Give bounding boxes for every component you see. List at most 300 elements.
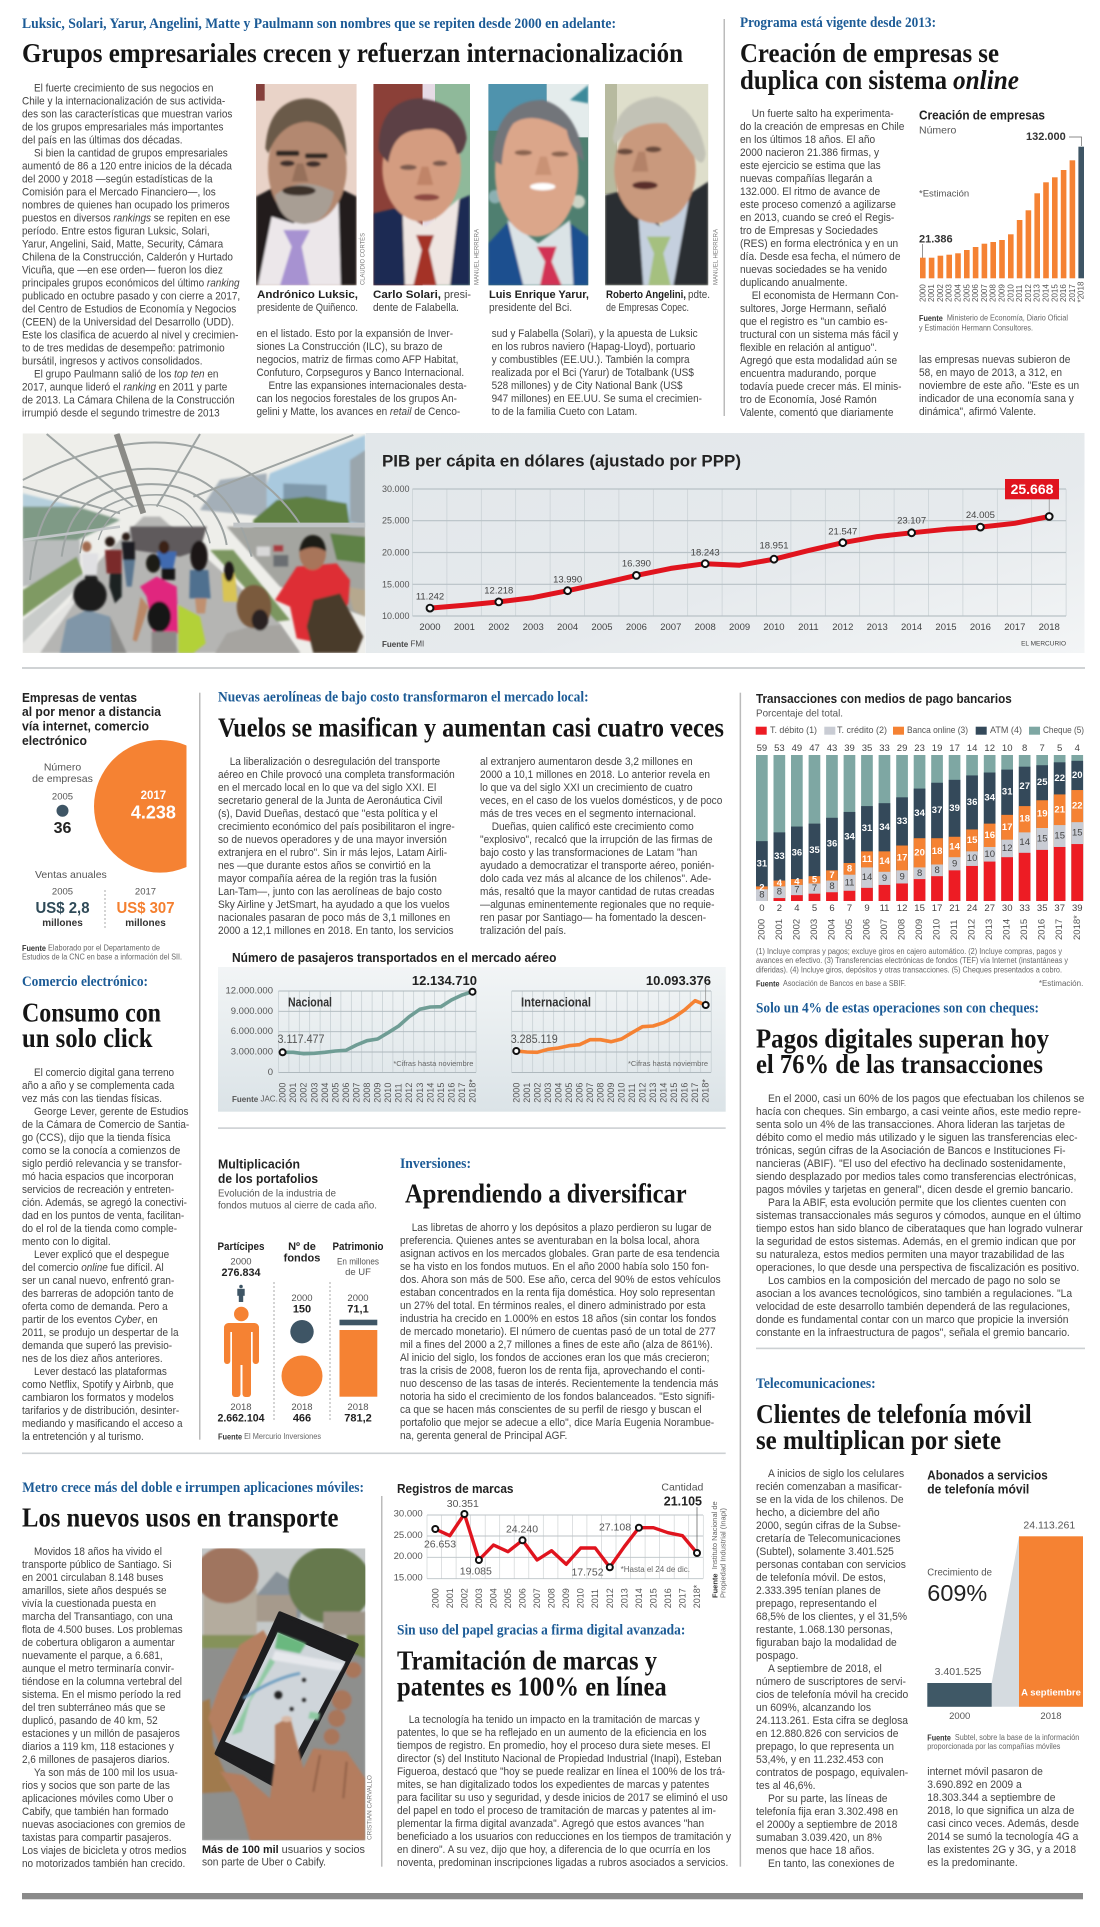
débito labels: 0 bbox=[759, 903, 765, 914]
years: 2014 bbox=[1002, 919, 1013, 940]
sales: US$ 2,8 bbox=[36, 900, 90, 917]
text block: telefonía columna 1: 53,4%, y en 11.232.453 con bbox=[756, 1754, 883, 1766]
line chart: Internacional: 2004 bbox=[553, 1083, 563, 1103]
value labels: 12.218 bbox=[484, 586, 513, 596]
kicker: Nuevas aerolíneas de bajo costo transformaron el mercado local: bbox=[218, 689, 589, 705]
x axis labels bbox=[419, 622, 1060, 633]
débito labels: 9 bbox=[864, 903, 870, 914]
source bbox=[710, 1501, 728, 1598]
text block: vuelos columna 1: extranjera en el rubro". Sin ir más lejos, Latam Airli- bbox=[218, 846, 447, 859]
text block: grupos columna 3: y combustibles (EE.UU.). También la compra bbox=[492, 354, 690, 366]
text block: en dinero". A su vez, dijo que hoy, a diferencia de lo que ocurría en los bbox=[397, 1844, 710, 1856]
text block: creación columna 1: 132.000. El ritmo de avance de bbox=[740, 185, 880, 198]
text block: mil a fines del 2000 a 2,7 millones a fines de este año (alza de 861%). bbox=[400, 1339, 713, 1351]
caption: Más de 100 mil usuarios y socios bbox=[202, 1844, 365, 1856]
column: patrimonio: 781,2 bbox=[344, 1413, 372, 1425]
value labels: 17.752 bbox=[571, 1567, 604, 1579]
panel: grupos empresariales bbox=[22, 16, 720, 420]
line chart: Nacional: 0 bbox=[268, 1067, 273, 1078]
text block: vuelos columna 2: —algunas eminentemente regionales que no requie- bbox=[480, 898, 715, 911]
line chart: Nacional: 2005 bbox=[330, 1083, 340, 1103]
ATM labels bbox=[757, 770, 1083, 869]
heading: creación de empresas: online bbox=[953, 65, 1019, 95]
x axis labels: 2014 bbox=[901, 622, 922, 633]
text block: telefonía columna 2: casi cinco veces. Además, desde bbox=[927, 1818, 1079, 1830]
text block: siglo perdió relevancia y se transfor- bbox=[22, 1157, 182, 1170]
text block: en 2001 circulaban 8.148 buses bbox=[22, 1571, 163, 1584]
crédito labels: 12 bbox=[1002, 843, 1012, 854]
text block: nuevas asociaciones con gremios de bbox=[22, 1818, 185, 1831]
text block: pagos móviles y tarjetas en general", dicen desde el gremio bancario. bbox=[756, 1184, 1073, 1196]
text block: mento con lo digital. bbox=[22, 1235, 111, 1248]
text block: del comercio online fue difícil. Al bbox=[22, 1261, 164, 1274]
y axis labels bbox=[382, 484, 410, 621]
banca online labels: 11 bbox=[862, 854, 873, 865]
chart: abonados: 2000 bbox=[949, 1711, 970, 1722]
text block: flota de 4.500 buses. Los problemas bbox=[22, 1623, 183, 1636]
text block: creación columna 2: las empresas nuevas subieron de bbox=[919, 354, 1070, 366]
value labels: *Hasta el 24 de dic. bbox=[621, 1565, 690, 1574]
sales bbox=[35, 869, 175, 929]
cheque labels: 8 bbox=[1022, 743, 1027, 754]
text block: dad en los puntos de venta, facilitan- bbox=[22, 1209, 185, 1222]
text block: débito como el medio más utilizado y le siguen las transferencias elec- bbox=[756, 1132, 1078, 1144]
text block: telefonía columna 1: restante, 1.068.130 personas, bbox=[756, 1624, 893, 1636]
text block: La tecnología ha tenido un impacto en la tramitación de marcas y bbox=[409, 1714, 700, 1726]
notes: (1) Incluye compras y pagos; excluye giros en cajero automático. (2) Incluye compras, pagos y bbox=[756, 947, 1062, 956]
crédito labels: 10 bbox=[984, 849, 995, 860]
kicker: Telecomunicaciones: bbox=[756, 1376, 876, 1392]
line chart: Internacional: 2015 bbox=[669, 1083, 679, 1103]
heading: creación de empresas: duplica con sistema bbox=[740, 65, 947, 95]
crédito labels: 14 bbox=[862, 872, 872, 883]
axis years: 2010 bbox=[1006, 284, 1015, 302]
text block: de la Cámara de Comercio de Santia- bbox=[22, 1118, 190, 1131]
text block: vuelos columna 1: nes —que durante estos años se convirtió en la bbox=[218, 859, 431, 872]
text block: telefonía columna 2: 2018, lo que significa un alza de bbox=[927, 1805, 1074, 1817]
column: partícipes: Partícipes bbox=[218, 1241, 264, 1253]
text block: donde es fundamental contar con un marco que propicie la inversión bbox=[756, 1314, 1068, 1326]
text block: vuelos columna 1: Lan-Tam—, junto con las aerolíneas de bajo costo bbox=[218, 885, 442, 898]
text block: grupos columna 2: gelini y Matte, los avances en retail de Cenco- bbox=[256, 406, 460, 418]
text block: grupos columna 1: des son las características que muestran varios bbox=[22, 108, 232, 121]
line chart: Internacional: 2011 bbox=[627, 1083, 637, 1103]
text block: telefonía columna 1: prepago, lo que representa un bbox=[756, 1741, 894, 1753]
text block: creación columna 1: día. Desde esa fecha, el número de bbox=[740, 250, 901, 263]
crédito labels: 11 bbox=[845, 877, 854, 888]
text block: telefonía columna 1: el 2000y a septiembre de 2018 bbox=[756, 1819, 897, 1831]
chart: creación de empresas bbox=[918, 108, 1086, 332]
ATM labels: 25 bbox=[1037, 777, 1048, 788]
caption bbox=[202, 1844, 365, 1869]
text block: Los cambios en la composición del mercado de pago no solo se bbox=[768, 1275, 1060, 1287]
text block: telefonía columna 1: 24.113.261. Esta cifra se deglosa bbox=[756, 1715, 908, 1727]
ATM labels: 34 bbox=[879, 822, 890, 833]
panel: vuelos bbox=[218, 689, 726, 1112]
cheque labels: 23 bbox=[914, 743, 925, 754]
source: proporcionada por las compañías móviles bbox=[927, 1742, 1060, 1751]
x axis labels: 2005 bbox=[591, 622, 613, 633]
text block: creación columna 2: indicador de una economía sana y bbox=[919, 393, 1074, 405]
text block: partir de los eventos Cyber, en bbox=[22, 1313, 158, 1326]
text block: grupos columna 1: de 2013. La Cámara Chilena de la Construcción bbox=[22, 394, 235, 407]
value labels: 18.951 bbox=[759, 540, 789, 552]
text block: nancieras (ABIF). "El uso del efectivo ha declinado sostenidamente, bbox=[756, 1158, 1066, 1170]
panel: transacciones bbox=[756, 691, 1084, 988]
line chart: Internacional: 2016 bbox=[680, 1083, 690, 1103]
column: fondos: Nº de bbox=[288, 1241, 316, 1253]
years: 2010 bbox=[576, 1588, 586, 1608]
banca online labels: 4 bbox=[777, 878, 783, 889]
photo: teléfono con aplicación bbox=[195, 1547, 372, 1840]
markers bbox=[427, 513, 1053, 611]
notes: avances en efectivo. (3) Transferencias electrónicas de fondos (TEF) vía Internet (instantáneas y bbox=[756, 956, 1068, 965]
text block: como se la conocía a comienzos de bbox=[22, 1144, 180, 1157]
label bbox=[32, 762, 93, 802]
text block: creación columna 1: El economista de Hermann Con- bbox=[752, 289, 899, 302]
caption: Angelini: pdte. bbox=[688, 289, 710, 301]
text block: grupos columna 1: Si bien la cantidad de grupos empresariales bbox=[34, 147, 228, 160]
years: 2018* bbox=[1072, 915, 1083, 940]
text block: 2011, se produjo un despertar de la bbox=[22, 1326, 179, 1339]
text block: estaciones y un millón de pasajeros bbox=[22, 1727, 180, 1740]
text block: telefonía columna 1: A inicios de siglo los celulares bbox=[768, 1468, 904, 1480]
text block: mó hacia espacios que incorporan bbox=[22, 1170, 174, 1183]
line chart: Nacional: 2003 bbox=[309, 1083, 319, 1103]
line chart: Nacional: 2011 bbox=[394, 1083, 404, 1103]
subtitle bbox=[218, 1188, 377, 1211]
text block: telefonía columna 1: tes al 46,6%. bbox=[756, 1780, 816, 1792]
text block: grupos columna 1: 2017, aunque lideró el ranking en 2011 y parte bbox=[22, 381, 227, 394]
line chart: Internacional: 2000 bbox=[511, 1083, 521, 1103]
years: 2009 bbox=[914, 919, 925, 940]
text block: grupos columna 2: siones La Construcción (ILC), su brazo de bbox=[256, 341, 443, 353]
column: patrimonio: Patrimonio bbox=[332, 1241, 384, 1253]
ATM labels: 37 bbox=[932, 805, 942, 816]
text block: telefonía columna 1: cios de telefonía móvil ha crecido bbox=[756, 1689, 908, 1701]
banca online labels: 20 bbox=[914, 847, 925, 858]
years: 2011 bbox=[949, 920, 960, 940]
kicker: Inversiones: bbox=[400, 1156, 471, 1172]
line chart: Nacional: Nacional bbox=[288, 996, 332, 1010]
cheque labels: 17 bbox=[949, 743, 960, 754]
text block: telefonía columna 1: 2000, según cifras de la Subse- bbox=[756, 1520, 901, 1532]
heading bbox=[22, 691, 162, 748]
cheque labels: 4 bbox=[1075, 743, 1080, 754]
value labels bbox=[424, 1498, 690, 1579]
line chart: Internacional: 2001 bbox=[522, 1083, 532, 1103]
label: 2005 bbox=[52, 792, 73, 802]
x axis labels: 2000 bbox=[419, 622, 441, 633]
kicker: grupos: Luksic, Solari, Yarur, Angelini, Matte y Paulmann son nombres que se repiten desde 2000 en adelante: bbox=[22, 16, 616, 32]
ATM labels: 31 bbox=[1002, 787, 1013, 798]
caption: Luksic bbox=[257, 289, 358, 314]
line chart: Internacional: 2010 bbox=[616, 1083, 626, 1103]
débito labels: 12 bbox=[897, 903, 907, 914]
text block: vuelos columna 2: veces, en el caso de los vuelos domésticos, y de poco bbox=[480, 794, 722, 807]
text block: estaban concentrados en la renta fija doméstica. Hoy solo representan bbox=[400, 1287, 715, 1299]
axis years: 2012 bbox=[1024, 284, 1033, 302]
text block: no motorizados también han crecido. bbox=[22, 1857, 185, 1870]
ATM labels: 20 bbox=[1072, 770, 1083, 781]
value: 21.386: 21.386 bbox=[919, 234, 953, 246]
text block: creación columna 1: (RES) en forma electrónica y en un bbox=[740, 237, 898, 250]
axis years: 2015 bbox=[1050, 284, 1059, 302]
x axis labels: 2001 bbox=[454, 622, 475, 633]
line chart: Nacional: 2015 bbox=[436, 1083, 446, 1103]
label: de empresas bbox=[32, 773, 93, 785]
line chart: Internacional: 2006 bbox=[574, 1083, 584, 1103]
text block: Las libretas de ahorro y los depósitos a plazo perdieron su lugar de bbox=[412, 1222, 712, 1234]
text block: creación columna 1: do la creación de empresas en Chile bbox=[740, 120, 904, 133]
series line bbox=[435, 1514, 697, 1567]
crédito labels: 15 bbox=[1072, 828, 1083, 839]
y axis labels: 15.000 bbox=[382, 579, 410, 589]
line chart: Nacional: 2001 bbox=[288, 1083, 298, 1103]
text block: vez más con las tiendas físicas. bbox=[22, 1092, 162, 1105]
text block: grupos columna 1: Chilena de la Construcción, Calderón y Hurtado bbox=[22, 251, 233, 264]
text block: grupos columna 1: Comisión para el Mercado Financiero—, los bbox=[22, 186, 216, 199]
chart title: Creación de empresas bbox=[919, 108, 1045, 122]
text block: creación columna 1: todavía puede crecer más. El minis- bbox=[740, 380, 902, 393]
legend: Cheque (5) bbox=[1043, 725, 1084, 736]
x axis labels: 2015 bbox=[935, 622, 957, 633]
text block: tiéndose en la columna vertebral del bbox=[22, 1675, 182, 1688]
text block: vuelos columna 2: 2000 a 10,1 millones en 2018. Lo anterior revela en bbox=[480, 768, 710, 781]
line chart: Nacional: 2014 bbox=[425, 1083, 435, 1103]
text block: grupos columna 1: aumentó de 86 a 120 entre inicios de la década bbox=[22, 160, 232, 173]
heading: Clientes de telefonía móvil bbox=[756, 1399, 1032, 1429]
text block: tiempos de registro. En promedio, hoy el proceso dura siete meses. El bbox=[397, 1740, 710, 1752]
text block: creación columna 1: en 2013, cuando se creó el Regis- bbox=[740, 211, 895, 224]
bar 2018 bbox=[1019, 1536, 1083, 1707]
axis years: 2011 bbox=[1015, 284, 1024, 302]
value labels: 26.653 bbox=[424, 1539, 456, 1551]
source: *Estimación. bbox=[1039, 979, 1083, 988]
line chart: Nacional: 2002 bbox=[299, 1083, 309, 1103]
text block: creación columna 1: este proceso comenzó a agilizarse bbox=[740, 198, 896, 211]
text block: vuelos columna 2: Dueñas, quien calificó este crecimiento como bbox=[492, 820, 694, 833]
text block: cambiaron los formatos y modelos bbox=[22, 1391, 174, 1404]
text block: taxistas para compartir pasajeros. bbox=[22, 1831, 171, 1844]
column: patrimonio: 71,1 bbox=[347, 1304, 369, 1316]
débito labels: 17 bbox=[932, 903, 942, 914]
text block: telefonía columna 1: 2.333.395 tenían planes de bbox=[756, 1585, 881, 1597]
heading bbox=[218, 1157, 318, 1186]
banca online labels: 14 bbox=[949, 842, 961, 852]
axis years: 2001 bbox=[927, 284, 936, 302]
débito labels: 24 bbox=[967, 903, 977, 914]
sales: US$ 307 bbox=[116, 900, 175, 917]
line chart: Internacional: 2002 bbox=[532, 1083, 542, 1103]
text block: grupos columna 1: período. Entre estos figuran Luksic, Solari, bbox=[22, 225, 210, 238]
text block: grupos columna 3: 528 millones) y de City National Bank (US$ bbox=[492, 380, 683, 392]
notes bbox=[756, 947, 1068, 974]
cheque labels: 43 bbox=[827, 743, 837, 754]
kicker: programa: Programa está vigente desde 2013: bbox=[740, 15, 936, 31]
text block: creación columna 1: duplicando anualmente. bbox=[740, 276, 848, 289]
value labels: 30.351 bbox=[447, 1498, 479, 1510]
axis years: 2013 bbox=[1033, 284, 1042, 302]
years: 2017 bbox=[678, 1588, 688, 1608]
text block: vuelos columna 1: en el mercado local en lo que va del siglo XXI. El bbox=[218, 781, 436, 794]
text block: la seguridad de estos sistemas. Además, en el gremio indican que por bbox=[756, 1236, 1076, 1248]
text block: des barreras de adopción tanto de bbox=[22, 1287, 174, 1300]
column: partícipes: 2.662.104 bbox=[218, 1413, 265, 1425]
callout: 25.668 bbox=[1005, 479, 1059, 499]
years: 2004 bbox=[488, 1588, 498, 1608]
text block: telefonía columna 1: un 609%, alcanzando los bbox=[756, 1702, 871, 1714]
text block: vuelos columna 1: mayor compañía aérea de la región tras la fusión bbox=[218, 872, 437, 885]
text block: grupos columna 1: El grupo Paulmann salió de los top ten en bbox=[34, 368, 218, 381]
axis years: 2017 bbox=[1068, 284, 1077, 302]
crédito labels: 8 bbox=[759, 890, 765, 901]
ATM labels: 33 bbox=[774, 851, 785, 862]
text block: telefonía columna 1: sumaban 3.039.420, un 8% bbox=[756, 1832, 882, 1844]
text block: hacía con cheques. Sin embargo, a casi veinte años, este medio repre- bbox=[756, 1106, 1081, 1118]
text block: velocidad de este desarrollo también dependerá de las regulaciones, bbox=[756, 1301, 1070, 1313]
bar 2000 bbox=[927, 1683, 992, 1707]
column: fondos: 466 bbox=[293, 1413, 311, 1425]
text block: telefonía columna 1: se en la vida de los chilenos. De bbox=[756, 1494, 904, 1506]
ATM labels: 36 bbox=[827, 839, 837, 850]
years: 2007 bbox=[532, 1588, 542, 1608]
chart: registros de marcas bbox=[394, 1481, 728, 1608]
line chart: Nacional: 2010 bbox=[383, 1083, 393, 1103]
cheque labels: 10 bbox=[1002, 743, 1012, 754]
caption: Angelini: de Empresas Copec. bbox=[606, 302, 689, 314]
text block: asocian a los avances tecnológicos, sino también a regulaciones. "La bbox=[756, 1288, 1072, 1300]
banca online labels bbox=[759, 801, 1083, 893]
kicker: Sin uso del papel gracias a firma digital avanzada: bbox=[397, 1622, 685, 1638]
text block: grupos columna 2: Confuturo, Corpseguros y Banco Internacional. bbox=[256, 367, 464, 379]
text block: telefonía columna 2: las existentes 2G y 3G, y a 2018 bbox=[927, 1844, 1076, 1856]
caption: Luksic: presidente de Quiñenco. bbox=[257, 302, 358, 314]
text block: sistema. En el mismo período la red bbox=[22, 1688, 181, 1701]
débito labels: 5 bbox=[812, 903, 817, 914]
caption: Yarur: presidente del Bci. bbox=[489, 302, 572, 314]
crédito labels: 15 bbox=[1037, 834, 1047, 844]
ATM labels: 36 bbox=[967, 797, 977, 808]
kicker: Metro crece más del doble e irrumpen aplicaciones móviles: bbox=[22, 1480, 364, 1496]
débito labels: 39 bbox=[1072, 903, 1083, 914]
x axis labels: 2009 bbox=[729, 622, 750, 633]
débito labels: 35 bbox=[1037, 903, 1047, 914]
banca online labels: 2 bbox=[759, 882, 765, 893]
text block: En el 2000, casi un 60% de los pagos que efectuaban los chilenos se bbox=[768, 1093, 1084, 1105]
heading: creación de empresas: Creación de empresas se bbox=[740, 38, 999, 68]
caption: Angelini: Roberto Angelini, bbox=[606, 289, 686, 301]
source: Fuente Asociación de Bancos en base a SBIF. bbox=[756, 979, 906, 988]
years: 2007 bbox=[879, 919, 890, 940]
débito labels: 30 bbox=[1002, 903, 1012, 914]
text block: su naturaleza, estos medios permiten una mayor trazabilidad de las bbox=[756, 1249, 1064, 1261]
axis years: 2014 bbox=[1042, 284, 1050, 302]
line chart: Nacional: 2008 bbox=[362, 1083, 372, 1103]
text block: telefonía columna 1: En tanto, las conexiones de bbox=[768, 1858, 894, 1870]
years: 2003 bbox=[809, 919, 820, 940]
text block: creación columna 1: nuevas sociedades se ha venido bbox=[740, 263, 887, 276]
débito labels: 2 bbox=[777, 903, 782, 914]
value labels bbox=[416, 510, 995, 602]
line chart: Nacional: 2007 bbox=[352, 1083, 362, 1103]
source bbox=[22, 944, 182, 962]
heading: Pagos digitales superan hoy bbox=[756, 1023, 1049, 1053]
text block: Cabify, que también han formado bbox=[22, 1805, 169, 1818]
years: 2011 bbox=[590, 1589, 600, 1608]
years: 2016 bbox=[663, 1588, 673, 1608]
text block: Los viajes de bicicleta y otros medios bbox=[22, 1844, 186, 1857]
débito labels: 4 bbox=[794, 903, 800, 914]
callout: 25.668: 25.668 bbox=[1011, 481, 1054, 497]
ATM labels: 39 bbox=[949, 803, 960, 814]
text block: go (CCS), dijo que la tienda física bbox=[22, 1131, 170, 1144]
text block: vuelos columna 1: so de nuevos operadores y de una mayor inversión bbox=[218, 833, 447, 846]
line chart: Internacional bbox=[511, 973, 711, 1103]
text block: diarios a 119 km, 118 estaciones y bbox=[22, 1740, 175, 1753]
text block: telefonía columna 1: recién comenzaban a masificar- bbox=[756, 1481, 902, 1493]
crédito labels: 9 bbox=[952, 858, 957, 869]
text block: 2,6 millones de pasajeros diarios. bbox=[22, 1753, 170, 1766]
line chart: Nacional: 2017 bbox=[457, 1083, 467, 1103]
axis years: 2008 bbox=[989, 284, 998, 302]
text block: Ya son más de 100 mil los usua- bbox=[34, 1766, 178, 1779]
subtitle: Evolución de la industria de bbox=[218, 1188, 336, 1200]
text block: trónicas, según cifras de la Asociación de Bancos e Instituciones Fi- bbox=[756, 1145, 1066, 1157]
text block: mites, se han digitalizado todos los expedientes de marcas y patentes bbox=[397, 1779, 709, 1791]
years: 2017 bbox=[1054, 919, 1065, 940]
cheque labels: 59 bbox=[757, 743, 767, 754]
text block: Al inicio del siglo, los fondos de acciones eran los que más crecieron; bbox=[400, 1352, 709, 1364]
text block: grupos columna 1: Yarur, Angelini, Said, Matte, Security, Cámara bbox=[22, 238, 223, 251]
value labels: 27.108 bbox=[599, 1521, 631, 1533]
text block: grupos columna 3: sud y Falabella (Solari), y la apuesta de Luksic bbox=[492, 328, 698, 340]
line chart: Nacional: 3.000.000 bbox=[231, 1046, 273, 1058]
column: patrimonio bbox=[332, 1241, 384, 1425]
y axis labels: 30.000 bbox=[382, 484, 410, 494]
text block: telefonía columna 1: A septiembre de 2018, el bbox=[768, 1663, 882, 1675]
panel: multiplicación de los portafolios bbox=[218, 1157, 384, 1441]
heading: al por menor a distancia bbox=[22, 705, 162, 719]
chart title bbox=[927, 1468, 1048, 1497]
line chart: Nacional: 2018* bbox=[468, 1079, 478, 1103]
text block: grupos columna 1: puestos en diversos rankings se repiten en ese bbox=[22, 212, 230, 225]
banca online labels: 7 bbox=[829, 870, 835, 881]
text block: grupos columna 1: principales grupos económicos del último ranking bbox=[22, 277, 240, 290]
y axis labels: 25.000 bbox=[382, 516, 410, 526]
axis years: 2003 bbox=[945, 284, 954, 302]
text block: vuelos columna 2: tralización del país. bbox=[480, 924, 566, 937]
text block: telefonía columna 1: contratos de pospago, equivalen- bbox=[756, 1767, 909, 1779]
crédito labels: 9 bbox=[882, 873, 887, 884]
chart title: PIB per cápita en dólares (ajustado por PPP) bbox=[382, 452, 741, 470]
text block: demanda que superó las previsio- bbox=[22, 1339, 172, 1352]
line chart: Internacional: 2007 bbox=[585, 1083, 595, 1103]
source: Fuente Ministerio de Economía, Diario Oficial bbox=[919, 314, 1068, 322]
ATM labels: 33 bbox=[897, 816, 907, 827]
column: partícipes: 276.834 bbox=[222, 1267, 261, 1279]
years: 2003 bbox=[474, 1588, 484, 1608]
axis years: 2006 bbox=[971, 284, 980, 302]
phone screen bbox=[225, 1632, 346, 1770]
banca online labels: 15 bbox=[967, 835, 978, 846]
line chart: Internacional: 2017 bbox=[690, 1083, 700, 1103]
years: 2013 bbox=[984, 919, 995, 940]
text block: noventa, predominan inscripciones ligadas a rubros asociados a servicios. bbox=[397, 1857, 728, 1869]
ATM labels: 27 bbox=[1019, 781, 1030, 792]
x axis labels: 2012 bbox=[832, 622, 853, 633]
text block: vuelos columna 1: (s), David Dueñas, destacó que "esta política y el bbox=[218, 807, 438, 820]
